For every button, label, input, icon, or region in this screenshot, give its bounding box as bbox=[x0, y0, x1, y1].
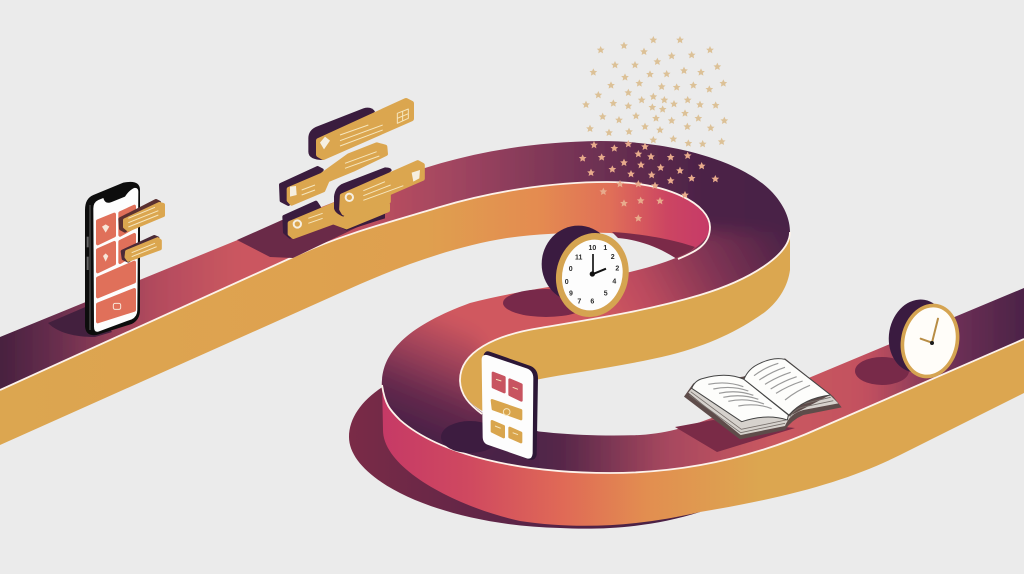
lower road wall bbox=[382, 339, 1024, 526]
icon: open book bbox=[684, 358, 842, 439]
gold return wall bbox=[460, 232, 790, 430]
icon: left phone bbox=[85, 182, 140, 335]
shadow: left phone bbox=[48, 305, 112, 337]
stars over road bbox=[579, 140, 719, 222]
clock numerals: 0 bbox=[569, 266, 573, 273]
clock numerals: 9 bbox=[569, 290, 573, 297]
shadow: second phone bbox=[441, 421, 499, 453]
road top surface bbox=[0, 141, 1024, 472]
ground shadow under road loop bbox=[349, 386, 700, 529]
bubble: lower bbox=[284, 202, 388, 237]
bubble: middle bbox=[281, 144, 386, 204]
upper road wall with inner curve bbox=[0, 182, 710, 445]
clock numerals: 2 bbox=[611, 254, 615, 261]
bubble: top bbox=[308, 101, 411, 160]
icon: plain clock bbox=[883, 295, 966, 384]
clock numerals: 4 bbox=[612, 278, 616, 285]
clock numerals: 5 bbox=[604, 291, 608, 298]
bubble: right bbox=[334, 162, 423, 217]
clock numerals bbox=[565, 245, 619, 306]
callouts: phone notification bubbles bbox=[120, 201, 163, 261]
clock hands bbox=[592, 254, 606, 274]
clock numerals: 6 bbox=[590, 299, 594, 306]
clock numerals: 11 bbox=[575, 254, 582, 261]
shadow: chat bubbles bbox=[237, 213, 387, 258]
clock numerals: 0 bbox=[565, 279, 569, 286]
clock numerals: 7 bbox=[577, 298, 581, 305]
shadow: book bbox=[675, 420, 795, 452]
white road edge lines bbox=[0, 182, 1024, 473]
clock numerals: 2 bbox=[615, 265, 619, 272]
clock numerals: 10 bbox=[588, 245, 596, 252]
icon: chat bubbles group bbox=[281, 101, 423, 237]
icon: wall clock with numerals bbox=[542, 225, 638, 325]
decorative star cloud bbox=[579, 36, 728, 222]
inner wall shadow bbox=[612, 232, 695, 259]
shadow: first clock bbox=[503, 289, 589, 317]
stars over background bbox=[582, 36, 728, 147]
shadow: second clock bbox=[855, 357, 909, 385]
clock numerals: 1 bbox=[603, 245, 607, 252]
icon: second phone bbox=[482, 351, 538, 460]
